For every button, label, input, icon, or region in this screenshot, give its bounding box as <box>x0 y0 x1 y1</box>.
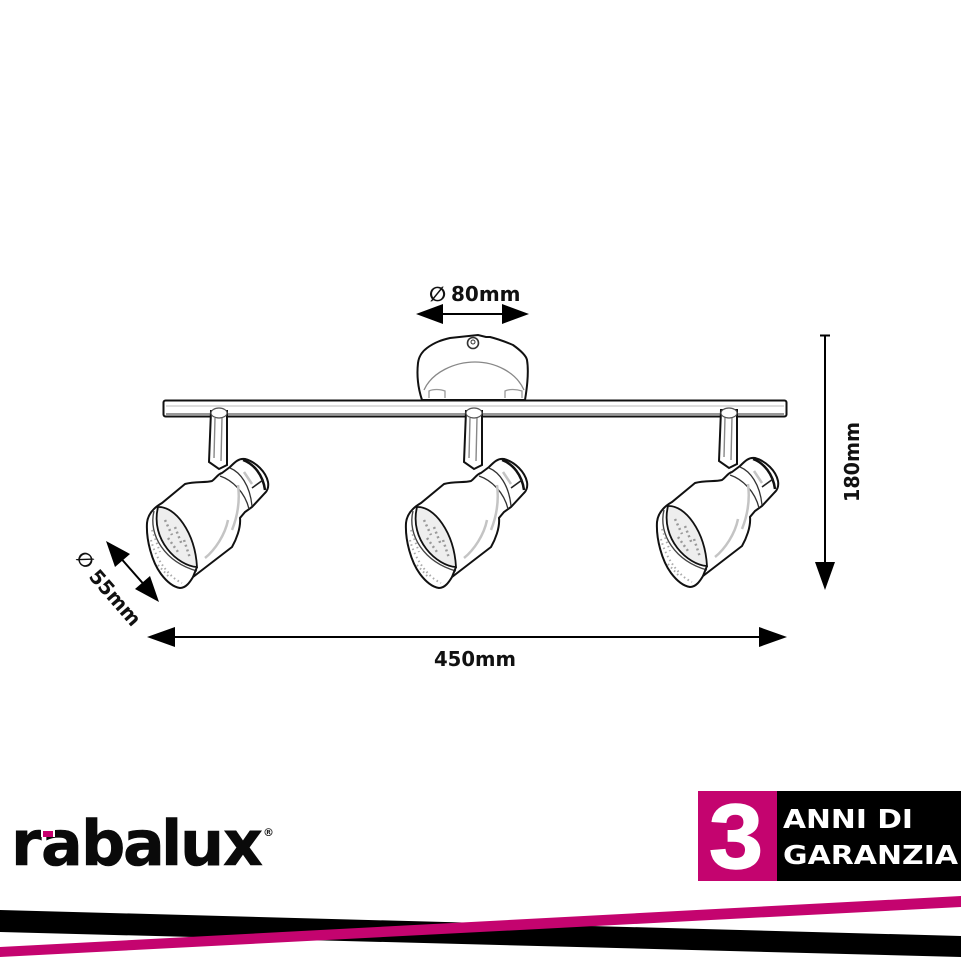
dimension: 450mm width: 450mm <box>434 647 516 671</box>
black stripe <box>0 910 961 957</box>
warranty text line 2: GARANZIA <box>783 841 958 871</box>
dimension: 55mm diameter: ∅ <box>71 547 99 574</box>
logo: rabalux: ® <box>263 826 274 839</box>
horizontal bar <box>164 400 786 416</box>
footer stripes <box>0 896 961 957</box>
dimension: 55mm diameter <box>71 541 159 631</box>
lamp drawing: three-spot ceiling fixture <box>147 335 786 588</box>
dimension: 55mm diameter: 55mm <box>84 565 146 631</box>
spotlight right <box>657 408 778 587</box>
pink stripe <box>0 896 961 957</box>
dimension: 450mm width <box>147 627 787 671</box>
dimension: 180mm height: 180mm <box>840 422 864 502</box>
pink square <box>698 791 777 881</box>
dimension: 80mm diameter: ∅ <box>429 282 446 306</box>
dimension: 80mm diameter: 80mm <box>451 282 521 306</box>
canopy <box>417 335 528 400</box>
logo: rabalux: rabalux <box>11 807 263 880</box>
dimension: 80mm diameter <box>416 282 529 324</box>
logo pink accent <box>43 831 53 837</box>
number 3: 3 <box>709 786 763 888</box>
warranty text line 1: ANNI DI <box>783 805 913 835</box>
warranty badge <box>698 786 961 888</box>
dimension: 180mm height <box>815 335 864 590</box>
spotlight middle <box>406 408 527 588</box>
spotlight left <box>147 408 268 588</box>
black box <box>777 791 961 881</box>
